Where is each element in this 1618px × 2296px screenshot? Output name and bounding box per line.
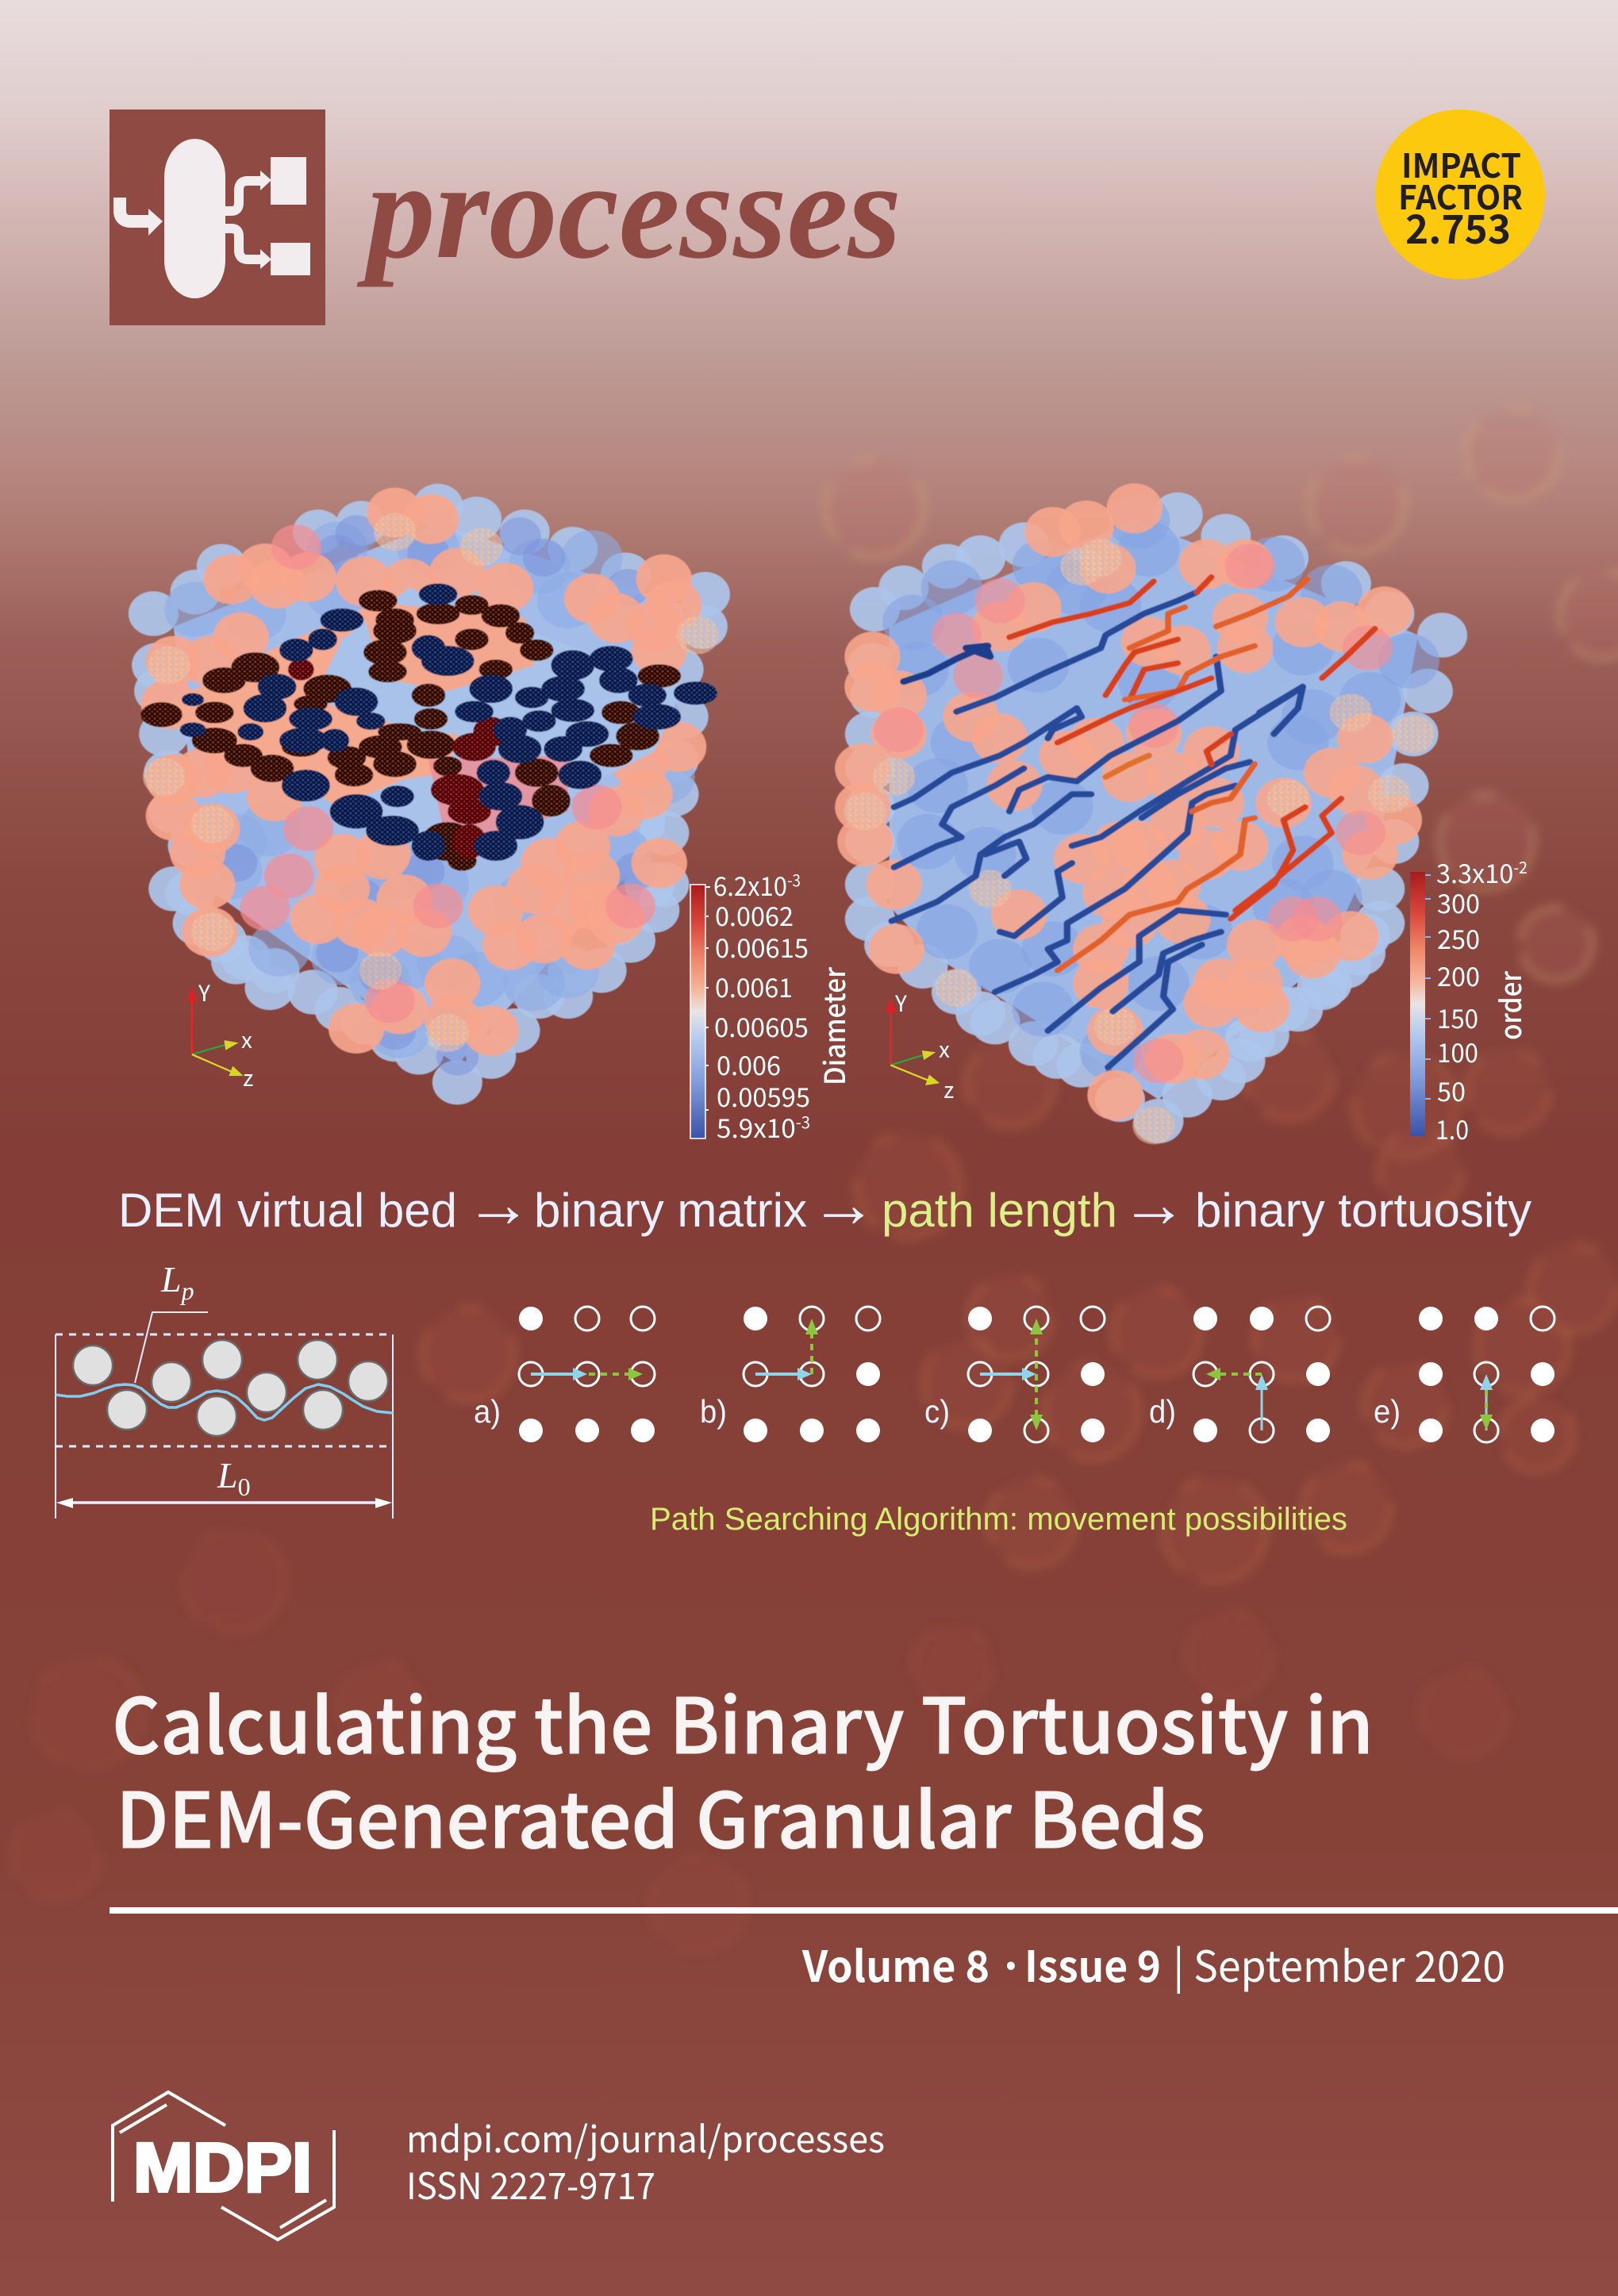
left axes triad: z (243, 1062, 253, 1093)
right axes triad (886, 987, 954, 1105)
right colour legend: 100 (1437, 1032, 1478, 1070)
ISSN: ISSN 2227-9717 (406, 2158, 655, 2210)
movement diagram a (474, 1307, 655, 1442)
grains (73, 1340, 388, 1436)
Lp leader (135, 1312, 208, 1383)
right colour legend: 150 (1437, 998, 1478, 1036)
right colour legend: 250 (1437, 919, 1480, 957)
workflow sentence (118, 1166, 1532, 1241)
right colour legend: 200 (1437, 956, 1480, 994)
light blue particles (845, 493, 1467, 1143)
MDPI logo: MDPI (133, 2129, 312, 2206)
journal name: processes (356, 133, 901, 288)
workflow sentence: → (465, 1166, 532, 1241)
bed silhouette fill (890, 519, 1418, 1100)
left colour legend: 0.00615 (715, 927, 809, 966)
algorithm caption: Path Searching Algorithm: movement possibilities (650, 1502, 1347, 1537)
movement diagram d (1149, 1307, 1330, 1442)
volume and issue line: Issue 9 (1024, 1932, 1161, 1995)
left colour legend: 0.0062 (715, 896, 794, 934)
impact factor badge: FACTOR (1398, 171, 1523, 220)
journal URL: mdpi.com/journal/processes (406, 2111, 885, 2164)
journal logo mark (110, 109, 325, 325)
left axes triad: x (241, 1023, 252, 1055)
workflow sentence: DEM virtual bed (118, 1184, 457, 1237)
left colour legend: 0.00605 (714, 1007, 809, 1045)
left particle bed: diameter (129, 484, 730, 1104)
speckled particles (844, 539, 1435, 1144)
speckled particles (143, 513, 719, 1052)
orange particles (141, 488, 706, 1056)
impact factor badge: 2.753 (1405, 198, 1511, 255)
right colour legend: 1.0 (1435, 1109, 1469, 1147)
left colour legend: 0.00595 (717, 1077, 810, 1115)
cut plane base (144, 588, 683, 866)
tortuous path line (56, 1384, 393, 1420)
L0 label: 0 (238, 1472, 251, 1501)
light blue particles (129, 484, 730, 1104)
red tortuous paths (1009, 577, 1375, 970)
movement diagram c: c) (924, 1393, 950, 1430)
orange particles (835, 483, 1422, 1120)
workflow sentence: → (1120, 1166, 1187, 1241)
left colour legend: -3 (787, 868, 801, 891)
left colour legend: 6.2x10 (713, 866, 792, 904)
workflow sentence: binary tortuosity (1195, 1184, 1532, 1237)
mid blue particles (164, 521, 695, 1058)
left legend title: Diameter (813, 967, 854, 1085)
L0 dimension arrow (56, 1498, 392, 1508)
darker blue particles (215, 515, 656, 1076)
left colour legend: 0.006 (717, 1045, 781, 1083)
movement diagram e: e) (1374, 1393, 1401, 1430)
right colour legend (1410, 853, 1530, 1147)
impact factor badge (1375, 109, 1545, 279)
volume and issue line: | (1173, 1932, 1185, 1995)
volume and issue line: September 2020 (1193, 1932, 1505, 1995)
movement diagram b: b) (700, 1393, 727, 1430)
L0 label: L (217, 1455, 238, 1495)
movement diagram d: d) (1149, 1393, 1176, 1430)
mid blue particles (882, 493, 1439, 1080)
volume and issue line (801, 1932, 1505, 1995)
dark orange sections (144, 592, 678, 869)
background bubbles (12, 408, 1618, 1952)
right colour legend: -2 (1513, 855, 1528, 878)
tortuosity schematic (56, 1259, 393, 1519)
left colour legend: 0.0061 (715, 967, 793, 1005)
left colour legend: 5.9x10 (717, 1108, 795, 1146)
right colour legend: 50 (1437, 1071, 1466, 1109)
right legend title: order (1489, 971, 1530, 1040)
pink particles (240, 524, 655, 1023)
movement diagram e (1374, 1307, 1555, 1442)
movement diagram b (700, 1307, 880, 1442)
red sections (290, 661, 506, 857)
article title (112, 1665, 1374, 1870)
MDPI logo (113, 2092, 334, 2240)
right colour legend: 3.3x10 (1436, 853, 1515, 891)
right particle bed: path order (835, 483, 1467, 1144)
workflow sentence: path length (882, 1184, 1117, 1237)
Lp label: p (180, 1277, 194, 1305)
movement diagram c (924, 1307, 1105, 1442)
left colour legend (690, 866, 854, 1146)
right axes triad: z (944, 1073, 954, 1105)
Lp label: L (161, 1259, 182, 1300)
dark blue tortuous paths (892, 592, 1303, 1067)
movement diagram a: a) (474, 1393, 501, 1430)
right axes triad: x (939, 1033, 950, 1065)
pink particles (874, 544, 1393, 1083)
article title: Calculating the Binary Tortuosity in (112, 1665, 1374, 1776)
volume and issue line: · (998, 1932, 1024, 1995)
workflow sentence: → (810, 1166, 877, 1241)
left axes triad (186, 977, 253, 1093)
impact factor badge: IMPACT (1401, 140, 1521, 188)
dark blue sections (183, 586, 715, 858)
right colour legend: 300 (1437, 883, 1480, 921)
right axes triad: Y (894, 987, 907, 1019)
article title: DEM-Generated Granular Beds (116, 1760, 1205, 1870)
bed silhouette fill (174, 524, 683, 1065)
volume and issue line: Volume 8 (801, 1932, 990, 1995)
workflow sentence: binary matrix (534, 1184, 807, 1237)
left colour legend: -3 (796, 1110, 810, 1133)
title rule (110, 1907, 1618, 1914)
left axes triad: Y (198, 977, 210, 1008)
